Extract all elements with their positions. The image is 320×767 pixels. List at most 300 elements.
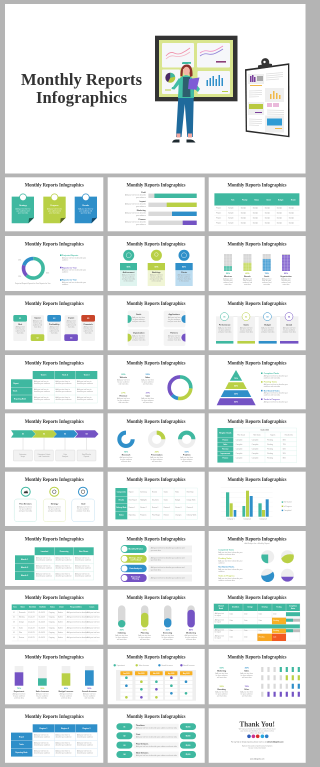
pyramid legend: Add your text here to describe your bbox=[264, 400, 288, 403]
task table: Add your text here bbox=[87, 621, 100, 624]
card: achievement: 90% bbox=[127, 266, 131, 268]
stat: sales: and main idea bbox=[242, 677, 252, 679]
row 03: Past Services bbox=[136, 742, 148, 745]
process boxes: Determine bbox=[19, 453, 27, 456]
components table: Review 6 bbox=[187, 507, 193, 509]
card: organization: for your audience bbox=[133, 336, 145, 339]
data table: Pending bbox=[267, 457, 273, 459]
pie: blue bbox=[261, 569, 274, 582]
card: applications: Applications bbox=[169, 313, 180, 316]
legend: Department bbox=[117, 664, 125, 667]
sticky note: results: your main idea bbox=[81, 212, 91, 215]
heading: Monthly Reports Infographics bbox=[25, 184, 84, 189]
legend: Completed bbox=[284, 509, 291, 512]
cylinder: blue: for your audience bbox=[83, 694, 95, 698]
donut: 75% bbox=[119, 433, 133, 463]
donut: 25%: for your audience bbox=[151, 458, 163, 461]
column labels: Organization bbox=[280, 275, 293, 278]
task table: Meeting bbox=[19, 616, 25, 619]
blue matrix table: Add your text here to bbox=[77, 741, 91, 744]
task table: Responsibilities bbox=[70, 606, 82, 609]
gauge: executing: for your audience bbox=[162, 636, 174, 639]
panel: pill list slide bbox=[108, 531, 205, 586]
pyramid legend: Completed Tasks bbox=[264, 372, 279, 375]
table: Sample bbox=[277, 222, 282, 224]
card: strategy bbox=[43, 487, 66, 522]
task table: Add your text here bbox=[87, 616, 100, 619]
gauge: monitoring: Monitoring bbox=[186, 632, 197, 635]
row 02 bbox=[116, 732, 196, 739]
column labels: Add your text bbox=[262, 277, 272, 280]
gauge: initiating: for your audience bbox=[116, 636, 128, 639]
card: backlogs: for your audience bbox=[150, 276, 163, 278]
cylinder: lime bbox=[59, 666, 73, 700]
task table: Admin bbox=[58, 631, 63, 634]
blue matrix table: Add your text here to bbox=[56, 741, 70, 744]
matrix table: describe your audience bbox=[56, 558, 72, 562]
text list bbox=[218, 548, 243, 582]
table: Sample bbox=[228, 222, 234, 224]
task table: Start Date bbox=[29, 606, 36, 609]
column labels: Add your text bbox=[243, 277, 253, 280]
tag card 01: main idea bbox=[17, 332, 24, 334]
text list: Add your text here to describe your bbox=[218, 577, 243, 580]
card: clients: Clients bbox=[181, 271, 187, 274]
task table: 01-03-23 bbox=[39, 627, 45, 629]
gauge: executing: 30% bbox=[166, 630, 170, 632]
card: achievement bbox=[120, 250, 137, 286]
donut percent labels: 15% bbox=[18, 276, 22, 278]
column labels: audience and bbox=[223, 282, 233, 284]
components table: Review 4 bbox=[164, 507, 170, 509]
process boxes: Scope bbox=[21, 456, 25, 458]
card: applications: Add your text here bbox=[168, 316, 181, 319]
step card 01: Performance bbox=[219, 324, 230, 326]
cylinder: purple bbox=[13, 666, 25, 700]
matrix table: describe your audience bbox=[75, 566, 91, 570]
matrix table: describe your audience bbox=[56, 390, 72, 393]
pie: lime bbox=[281, 550, 294, 563]
status table: Add your text bbox=[215, 629, 224, 632]
text list: audience bbox=[218, 562, 225, 564]
cylinder: lime: for your audience bbox=[60, 694, 72, 698]
gauge: monitoring: and main idea bbox=[186, 639, 196, 641]
legend: targets: Add your text here to describe your bbox=[62, 256, 87, 259]
status table: Status bbox=[291, 607, 295, 610]
panel: components table slide bbox=[108, 472, 205, 526]
table: Sample bbox=[265, 213, 270, 215]
thank you heading: Thank You! bbox=[240, 720, 275, 728]
axis labels: Category 3 bbox=[259, 518, 267, 521]
donut percent labels bbox=[18, 260, 50, 278]
matrix table: describe your audience bbox=[56, 398, 72, 401]
cylinder: teal: Add your text here bbox=[36, 692, 49, 696]
donut: 25%: Presentation bbox=[151, 453, 163, 456]
row 04: Add your text here to describe your audience and main idea bbox=[136, 754, 177, 757]
legend: targets: audience bbox=[62, 259, 68, 261]
legend: Sales Increase bbox=[139, 664, 149, 667]
bar labels: your audience bbox=[136, 223, 146, 226]
matrix table: Report bbox=[13, 382, 19, 385]
blue matrix table: describe your audience bbox=[34, 751, 50, 754]
task table: End Date bbox=[39, 606, 46, 609]
month headers: Apr 2023 bbox=[168, 672, 175, 675]
blue matrix table: describe your audience bbox=[77, 735, 93, 738]
matrix table: Add your text here to bbox=[36, 572, 50, 576]
stat: other bbox=[240, 686, 253, 698]
bar labels: Marketing bbox=[137, 209, 147, 212]
card: organization: Organization bbox=[133, 331, 145, 334]
legend: targets: Add your text here to describe your bbox=[62, 281, 87, 284]
row 03: 03 bbox=[123, 745, 125, 747]
process boxes: and Constraints bbox=[39, 455, 50, 458]
blue matrix table: describe your audience bbox=[56, 735, 72, 738]
step card 04: and your main idea bbox=[283, 330, 296, 333]
panel: pictogram bars slide bbox=[209, 649, 306, 704]
row 02: Add your text here to describe your audience and main idea bbox=[136, 735, 177, 738]
components table: Goals bbox=[164, 500, 168, 502]
components table: Results bbox=[119, 499, 124, 502]
stat: 53%: 53% bbox=[146, 374, 150, 376]
task table: 01 bbox=[13, 612, 15, 614]
heading: Monthly Reports Infographics bbox=[227, 656, 287, 660]
cylinder: lime: 60% bbox=[64, 688, 68, 690]
card: backlogs: 60% bbox=[155, 266, 159, 268]
column labels: here for your bbox=[243, 279, 252, 282]
legend: targets bbox=[60, 254, 87, 286]
card: strategy: for your audience bbox=[49, 508, 61, 511]
panel: chevron process slide bbox=[5, 413, 103, 467]
panel: tasks matrix slide bbox=[5, 355, 103, 409]
row: meetings: Add your text here to describe your audience and bbox=[151, 556, 185, 559]
stat: 27%: Add your text here bbox=[117, 397, 130, 400]
process boxes: Reports bbox=[84, 455, 89, 458]
text list: Not Started Tasks bbox=[218, 566, 234, 569]
column labels bbox=[223, 272, 293, 286]
task table: Ongoing bbox=[49, 612, 55, 614]
legend: targets: Add your text here to describe your bbox=[62, 269, 87, 272]
card: achievement: and your main idea bbox=[122, 278, 135, 280]
matrix table: Add your text here to bbox=[56, 388, 70, 391]
status table: for report bbox=[215, 637, 222, 640]
thank you message: We hope you found this template useful. Please leave bbox=[239, 727, 276, 730]
thank you message bbox=[239, 727, 276, 734]
row 02: Cost bbox=[136, 733, 141, 736]
components table: Components bbox=[117, 490, 126, 493]
stat: 27%: and main idea bbox=[119, 402, 128, 404]
gauge: initiating: 20% bbox=[120, 630, 124, 632]
card: goal: for your audience bbox=[77, 508, 89, 511]
heading: Monthly Reports Infographics bbox=[126, 302, 186, 307]
column labels: here for your bbox=[282, 279, 291, 282]
status table: for report bbox=[215, 621, 222, 624]
table: Sample bbox=[253, 208, 258, 210]
legend: In Progress bbox=[284, 505, 292, 508]
gauge: planning: for your audience bbox=[139, 636, 151, 639]
status table: Date bbox=[230, 619, 233, 622]
status table: Date bbox=[230, 636, 233, 639]
blue matrix table: describe your audience bbox=[56, 743, 72, 746]
task table: 01-03-23 bbox=[39, 637, 45, 639]
donut: 75%: for your audience bbox=[120, 458, 132, 461]
task table: Admin bbox=[58, 611, 63, 614]
step card 04 bbox=[280, 313, 298, 344]
stat: 37%: and main idea bbox=[143, 402, 153, 404]
card: clients: 80% bbox=[182, 266, 186, 268]
data table: 85% bbox=[283, 457, 286, 459]
matrix table: Month 1 bbox=[21, 558, 28, 561]
components table: Review 1 bbox=[129, 507, 135, 509]
task table: 06 bbox=[13, 637, 15, 639]
card: applications: and your main idea bbox=[168, 320, 181, 323]
row: reporting and planning: Planning bbox=[132, 578, 139, 580]
card: goal: and your main idea bbox=[77, 510, 90, 513]
task table: Add your text here to describe bbox=[67, 631, 87, 634]
task table: Add your text here to describe bbox=[67, 636, 87, 639]
table: Task bbox=[231, 199, 235, 201]
stat: sales: Add your text here bbox=[240, 672, 253, 675]
step card 01: for your audience bbox=[219, 328, 231, 331]
text list: audience and main idea bbox=[218, 554, 235, 556]
donut chart bbox=[169, 377, 191, 398]
task table: 01-03-23 bbox=[39, 612, 45, 614]
tag card 02: main idea bbox=[34, 326, 41, 328]
status table: Develop bbox=[262, 607, 268, 609]
blue matrix table: describe your audience bbox=[34, 735, 50, 738]
legend: Benefit Increase bbox=[183, 664, 195, 667]
tag card 05 bbox=[81, 315, 95, 341]
status table: Date bbox=[273, 613, 277, 616]
task table: 01-02-23 bbox=[28, 622, 35, 624]
status table: Late bbox=[273, 636, 276, 639]
matrix table: Add your text here to bbox=[75, 556, 89, 560]
row: meetings: your main idea bbox=[151, 559, 161, 562]
status table: Date bbox=[244, 629, 248, 632]
month headers: Mar 2023 bbox=[153, 672, 160, 675]
pyramid legend: Tasks in Progress bbox=[264, 399, 280, 401]
legend: targets: audience bbox=[62, 284, 68, 286]
gauge: executing bbox=[161, 605, 174, 641]
row 03: Add your text here to describe your audience and main idea bbox=[136, 745, 177, 748]
pyramid legend: Add your text here to describe your bbox=[264, 392, 288, 395]
heading: Monthly Reports Infographics bbox=[126, 538, 186, 542]
stat: 26%: for your audience bbox=[117, 380, 130, 384]
axis labels: Category 1 bbox=[227, 518, 235, 521]
table bbox=[214, 193, 299, 225]
heading: Monthly Reports Infographics bbox=[126, 596, 186, 601]
stat: 53%: and main idea bbox=[143, 384, 153, 386]
table: Sample bbox=[265, 218, 270, 220]
task table: 05 bbox=[13, 632, 15, 634]
donut percent labels: 25% bbox=[18, 260, 22, 262]
table: Sample bbox=[241, 213, 246, 215]
card: achievement: Add your text here bbox=[122, 274, 135, 276]
heading: Monthly Reports Infographics bbox=[227, 362, 287, 366]
card: achievement: in this section bbox=[124, 280, 133, 282]
text list: Add your text here to describe your bbox=[218, 560, 243, 562]
matrix table: describe your audience bbox=[77, 382, 93, 385]
status table: Date bbox=[259, 613, 262, 616]
table: Owner bbox=[266, 198, 271, 201]
stat: marketing: and main idea bbox=[217, 677, 227, 679]
sticky note: results: Results bbox=[82, 204, 89, 207]
stat: 37%: 37% bbox=[146, 392, 150, 394]
chevron arrows: 01 bbox=[22, 434, 24, 436]
tag card 01: 01 bbox=[19, 318, 21, 320]
card: organization: and your main idea bbox=[132, 338, 145, 341]
stat: other: for your audience bbox=[241, 692, 253, 696]
matrix table: describe your audience bbox=[36, 558, 52, 562]
components table: Goals bbox=[164, 491, 168, 493]
sticky note: progress: your audience and bbox=[48, 210, 61, 213]
row: monthly review bbox=[121, 545, 192, 553]
bottom legend: Projected Reports Reports for Year Reports for Year bbox=[15, 282, 51, 285]
connector line bbox=[224, 316, 289, 318]
sticky note: results bbox=[75, 194, 97, 223]
task table: 04 bbox=[13, 627, 15, 629]
step card 02: Goals bbox=[244, 324, 249, 326]
title: Monthly Reports Infographics: Infographics bbox=[36, 88, 128, 107]
text list: Pending Tasks bbox=[218, 558, 232, 560]
task table: Add your text here to describe bbox=[67, 611, 87, 614]
matrix table: describe your audience bbox=[36, 566, 52, 570]
card: partners bbox=[164, 329, 185, 346]
components table: Review 2 bbox=[140, 507, 147, 509]
heading: Monthly Reports Infographics bbox=[25, 656, 84, 660]
stat: 26%: 26% bbox=[121, 374, 126, 376]
bar labels: your audience bbox=[136, 196, 146, 199]
heading: Monthly Reports Infographics bbox=[126, 184, 186, 189]
matrix table: Processing bbox=[60, 551, 68, 553]
components table: Next Step bbox=[187, 490, 194, 493]
pictogram grid bbox=[261, 667, 300, 697]
tag card 01: here for your bbox=[16, 327, 25, 330]
status table: Date bbox=[230, 629, 233, 632]
blue matrix table: describe your audience bbox=[77, 743, 93, 746]
task table: Admin bbox=[58, 616, 63, 619]
tag card 05: Add your text bbox=[84, 325, 93, 328]
cylinder: blue bbox=[82, 666, 97, 700]
row 04: 04 bbox=[123, 753, 126, 756]
matrix table: describe your audience bbox=[75, 574, 91, 578]
text list: audience and main idea bbox=[218, 580, 235, 582]
donut: 25%: 25% bbox=[155, 451, 159, 453]
data table: Complete bbox=[252, 456, 258, 459]
pie: purple bbox=[281, 569, 294, 582]
panel: pie charts list slide bbox=[209, 531, 306, 586]
matrix table: Month 3 bbox=[21, 574, 28, 577]
donut: 75%: 75% bbox=[124, 451, 128, 453]
task table: Add your text here to describe bbox=[67, 626, 87, 629]
card: strategy: Add your text here bbox=[48, 506, 61, 509]
heading: Monthly Reports Infographics bbox=[25, 715, 84, 720]
step card 03 bbox=[259, 313, 277, 344]
schedule markers bbox=[125, 676, 187, 699]
status table: Add your text bbox=[215, 635, 224, 638]
data table: Complete bbox=[236, 443, 242, 446]
donut: 75%: Research bbox=[122, 454, 131, 456]
status table: Pending bbox=[259, 637, 265, 639]
matrix table: Reporting Mode bbox=[14, 398, 26, 400]
status table: Pending bbox=[273, 630, 279, 632]
column labels: 20% bbox=[226, 273, 230, 275]
table: Status bbox=[254, 198, 259, 201]
donut: 25% bbox=[150, 433, 163, 463]
donut: 50%: 50% bbox=[185, 451, 189, 453]
heading: Monthly Reports Infographics bbox=[227, 420, 287, 425]
gauge: planning: Planning bbox=[141, 633, 150, 635]
matrix table: Add your text here to bbox=[56, 556, 70, 560]
matrix table: Task 3 bbox=[84, 375, 89, 377]
gauge: initiating bbox=[115, 605, 128, 641]
cylinder: lime: and main idea bbox=[61, 698, 71, 700]
components table: Progress bbox=[140, 514, 147, 517]
cylinder: teal: 30% bbox=[40, 688, 45, 690]
components table: Reporting bbox=[129, 514, 136, 517]
panel: month matrix slide bbox=[5, 531, 103, 586]
task table: S.no bbox=[13, 607, 17, 609]
blue matrix table bbox=[11, 724, 97, 757]
row: monthly review: Monthly Review bbox=[129, 548, 143, 551]
row: reporting and planning: Reporting & bbox=[131, 575, 141, 578]
tag card 03: 03 bbox=[53, 318, 55, 320]
contact line: For any help or design requests, please reach us at sales@slidegeeks.com bbox=[231, 741, 284, 744]
panel: stacked grid columns slide bbox=[209, 236, 306, 291]
panel: cylinders slide bbox=[5, 649, 103, 704]
data table: Complete bbox=[236, 452, 242, 455]
stat: branding: Add your text here bbox=[215, 690, 228, 694]
status table: Completion bbox=[289, 605, 297, 608]
step card 02: Add your text here bbox=[240, 326, 253, 329]
title: Monthly Reports Infographics bbox=[21, 70, 143, 107]
column labels: main idea bbox=[244, 284, 251, 286]
task table: Admin bbox=[58, 626, 63, 629]
data table: Revenue bbox=[222, 448, 229, 450]
gauge: initiating: Initiating bbox=[118, 632, 126, 635]
panel: three rounded cards slide bbox=[5, 472, 103, 526]
table: Sample bbox=[228, 213, 234, 215]
stat: 53%: Sales bbox=[145, 377, 150, 379]
column labels: audience and bbox=[262, 282, 271, 284]
card: organization: Add your text here bbox=[132, 334, 145, 337]
data table: Results (%) bbox=[285, 433, 293, 436]
pyramid chart: 70% bbox=[234, 378, 238, 380]
status table: Add your text bbox=[215, 619, 224, 622]
tag card 02: Impact bbox=[34, 316, 41, 319]
card: partners: Partners bbox=[170, 331, 178, 334]
matrix table bbox=[15, 547, 94, 580]
blue matrix table: Region 3 bbox=[83, 728, 90, 730]
data table: 80% bbox=[283, 439, 286, 441]
data table: Complete bbox=[252, 438, 258, 441]
pie: teal bbox=[261, 550, 274, 563]
column labels: here for your bbox=[224, 279, 233, 282]
column labels: 40% bbox=[245, 272, 250, 275]
components table: Delivery Work bbox=[187, 514, 197, 517]
table: Sample bbox=[253, 222, 258, 224]
legend: targets: Reports for Year bbox=[62, 266, 77, 269]
donut: 50% bbox=[180, 433, 193, 463]
card: clients: Add your text here bbox=[178, 274, 190, 276]
stat: 53%: Add your text here bbox=[141, 378, 154, 382]
matrix table: Add your text here to bbox=[34, 396, 48, 399]
stat: sales: Sales bbox=[244, 670, 249, 672]
step card 01 bbox=[216, 313, 233, 344]
blue matrix table: Add your text here to bbox=[34, 749, 48, 752]
status table: Testing bbox=[276, 606, 282, 609]
table: Sample bbox=[253, 213, 258, 215]
row: meetings bbox=[121, 555, 192, 563]
